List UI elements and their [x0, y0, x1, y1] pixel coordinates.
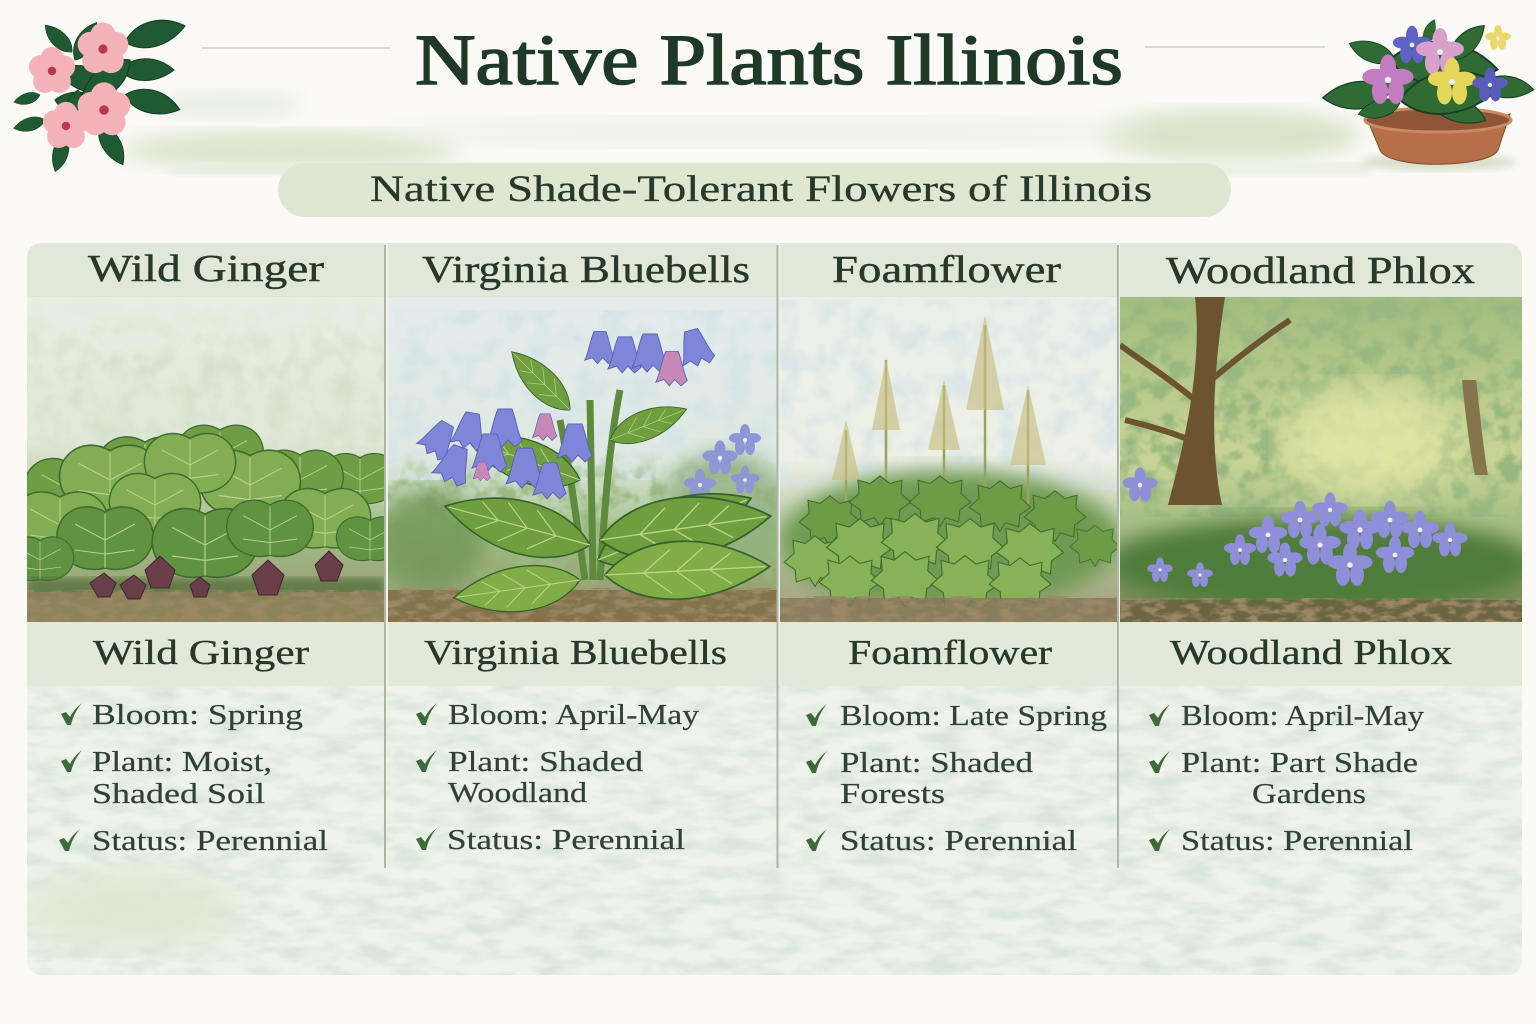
illustration: virginia bluebells	[375, 297, 790, 622]
heading: foamflower	[780, 243, 1117, 297]
heading: wild ginger details	[27, 622, 385, 686]
text block: virginia bluebells facts	[416, 699, 700, 856]
text block: woodland phlox facts	[1149, 700, 1425, 857]
panel: virginia bluebells	[375, 243, 790, 856]
heading: virginia bluebells details: Virginia Bluebells	[424, 633, 727, 672]
title: Native Plants Illinois	[415, 20, 1123, 100]
subtitle banner	[278, 163, 1231, 217]
heading: foamflower details	[780, 622, 1117, 686]
heading: foamflower details: Foamflower	[848, 633, 1052, 672]
title ornament lines	[202, 47, 1325, 48]
text block: foamflower facts: Bloom: Late Spring	[840, 700, 1107, 732]
heading: virginia bluebells: Virginia Bluebells	[422, 249, 750, 291]
text block: foamflower facts	[806, 700, 1107, 857]
text block: woodland phlox facts: Bloom: April-May	[1181, 700, 1425, 732]
text block: virginia bluebells facts: Woodland	[448, 777, 588, 809]
text block: foamflower facts: Status: Perennial	[840, 825, 1077, 857]
text block: woodland phlox facts: Gardens	[1252, 778, 1366, 810]
illustration: foamflower	[780, 297, 1120, 622]
subtitle banner: Native Shade-Tolerant Flowers of Illinois	[370, 168, 1152, 209]
text block: foamflower facts: Plant: Shaded	[840, 747, 1034, 779]
text block: wild ginger facts: Status: Perennial	[92, 825, 328, 857]
panel: wild ginger	[27, 243, 385, 851]
heading: wild ginger: Wild Ginger	[88, 248, 324, 290]
text block: woodland phlox facts: Status: Perennial	[1181, 825, 1413, 857]
panel: woodland phlox	[1105, 243, 1535, 857]
text block: foamflower facts: Forests	[840, 778, 945, 810]
heading: woodland phlox	[1120, 243, 1522, 297]
text block: wild ginger facts: Shaded Soil	[92, 778, 265, 810]
text block: virginia bluebells facts: Bloom: April-May	[448, 699, 700, 731]
text block: virginia bluebells facts: Plant: Shaded	[448, 746, 644, 778]
panel: foamflower	[780, 243, 1120, 857]
header landscape wash	[120, 91, 1370, 175]
text block: wild ginger facts	[59, 699, 328, 857]
text block: virginia bluebells facts: Status: Perennial	[447, 824, 685, 856]
heading: wild ginger details: Wild Ginger	[93, 633, 309, 672]
panel: plant table background	[20, 243, 1522, 975]
text block: woodland phlox facts: Plant: Part Shade	[1181, 747, 1418, 779]
heading: virginia bluebells details	[388, 622, 777, 686]
icon: flower pot	[1322, 18, 1535, 171]
text block: wild ginger facts: Bloom: Spring	[92, 699, 303, 731]
heading: woodland phlox details	[1120, 622, 1522, 686]
heading: virginia bluebells	[388, 243, 777, 297]
text block: wild ginger facts: Plant: Moist,	[92, 746, 272, 778]
illustration: woodland phlox	[1105, 297, 1535, 622]
heading: woodland phlox details: Woodland Phlox	[1170, 633, 1453, 672]
heading: foamflower: Foamflower	[832, 249, 1061, 291]
heading: woodland phlox: Woodland Phlox	[1166, 250, 1475, 292]
illustration: wild ginger	[27, 298, 384, 622]
icon: pink flower bouquet	[12, 13, 188, 174]
heading: wild ginger	[27, 243, 385, 297]
